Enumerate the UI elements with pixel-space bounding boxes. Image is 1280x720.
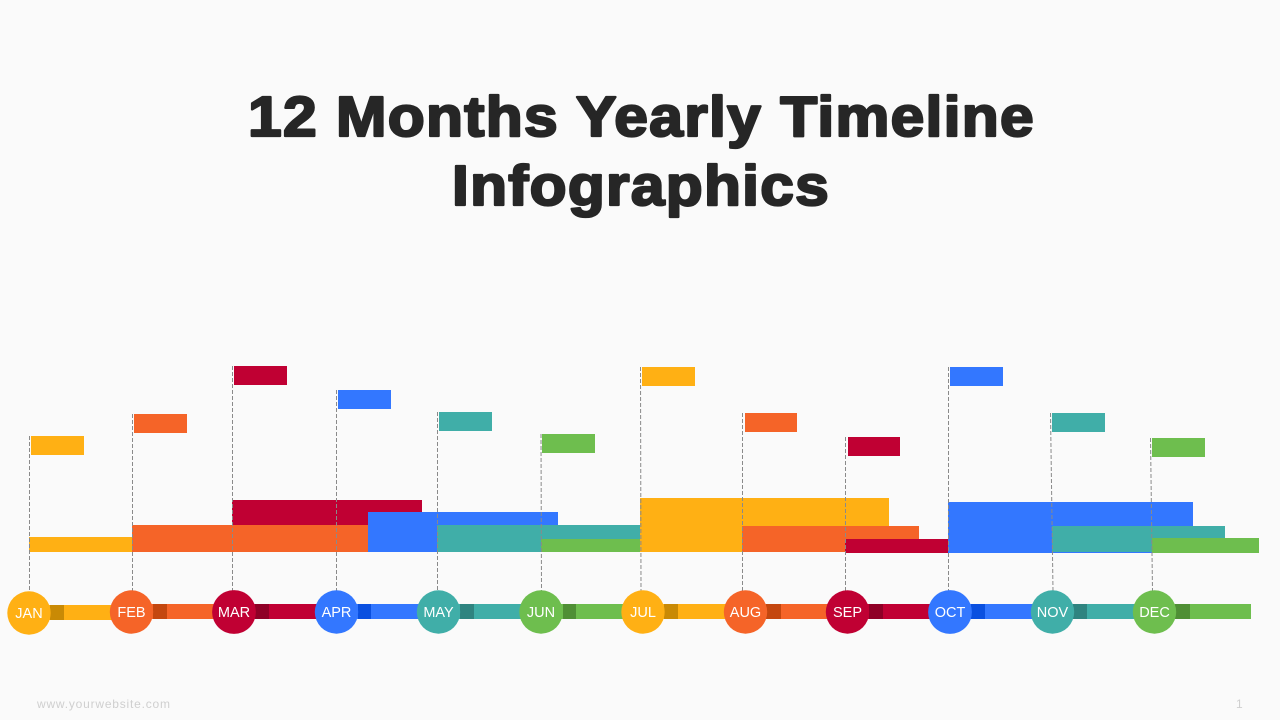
marker: FEB: FEB bbox=[117, 605, 146, 621]
timeline track bbox=[29, 604, 1251, 620]
marker: MAY: MAY bbox=[423, 605, 454, 621]
marker: JUN bbox=[519, 590, 563, 634]
marker: SEP: SEP bbox=[833, 605, 862, 621]
marker: DEC bbox=[1133, 590, 1176, 634]
stacked overlapping duration bars bbox=[29, 498, 1259, 553]
marker: APR: APR bbox=[322, 605, 351, 621]
flags bbox=[31, 366, 1205, 457]
month markers bbox=[7, 590, 1176, 635]
marker: APR bbox=[315, 590, 358, 634]
dashed month connector lines bbox=[30, 366, 1152, 592]
page number: 1 bbox=[1236, 697, 1243, 711]
marker: MAR: MAR bbox=[218, 605, 250, 621]
marker: AUG bbox=[724, 590, 767, 634]
marker: JUL: JUL bbox=[630, 605, 656, 621]
footer website: www.yourwebsite.com bbox=[36, 697, 170, 711]
title bbox=[248, 85, 1035, 218]
marker: OCT bbox=[928, 590, 972, 634]
marker: SEP bbox=[826, 590, 869, 634]
marker: NOV: NOV bbox=[1037, 605, 1069, 621]
title: 12 Months Yearly Timeline bbox=[248, 85, 1035, 149]
marker: OCT: OCT bbox=[935, 605, 965, 621]
marker: JUL bbox=[621, 590, 665, 634]
marker: MAR bbox=[212, 590, 256, 634]
marker: JAN: JAN bbox=[15, 606, 43, 622]
marker: AUG: AUG bbox=[730, 605, 761, 621]
marker: NOV bbox=[1031, 590, 1074, 634]
marker: JUN: JUN bbox=[527, 605, 555, 621]
marker: JAN bbox=[7, 591, 51, 635]
marker: FEB bbox=[110, 590, 153, 634]
marker: DEC: DEC bbox=[1139, 605, 1170, 621]
marker: MAY bbox=[417, 590, 460, 634]
title: Infographics bbox=[452, 154, 830, 218]
